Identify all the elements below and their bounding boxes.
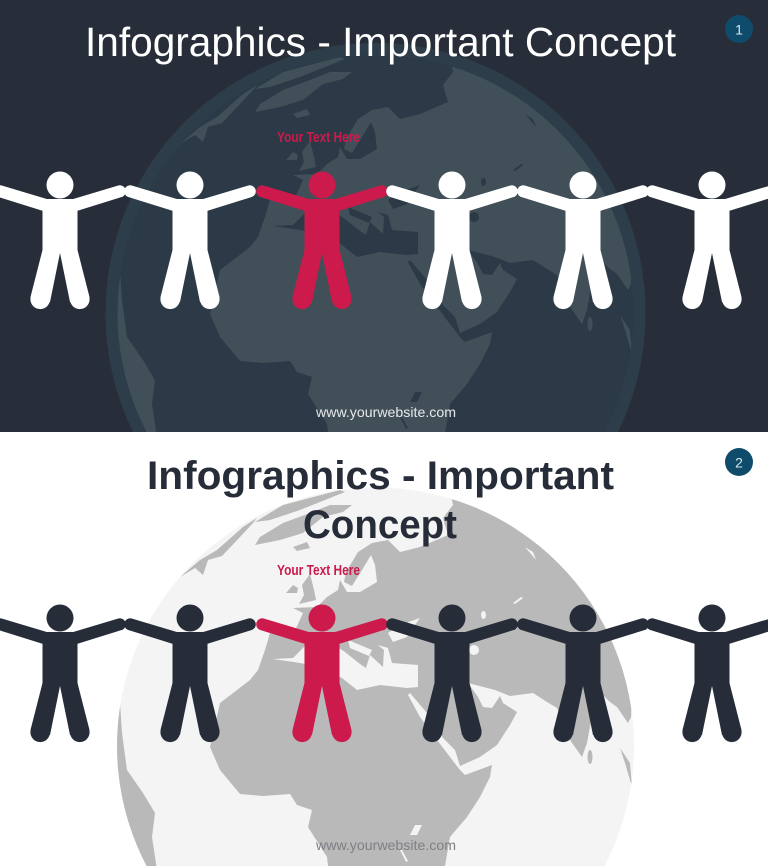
- badge: number 2: [725, 448, 753, 476]
- figure 5: [517, 604, 649, 742]
- figure 3 highlighted: [256, 604, 388, 742]
- figure 2: [124, 172, 256, 309]
- panel: light slide: [0, 432, 768, 866]
- title: light slide: Concept: [303, 503, 457, 547]
- badge: number 1: 1: [735, 22, 743, 38]
- title: light slide: Infographics - Important: [147, 454, 614, 498]
- label: your text here: Your Text Here: [277, 129, 360, 146]
- badge: number 2: 2: [735, 454, 743, 470]
- title: light slide: [147, 454, 614, 547]
- figures: chain of people, light slide: [0, 604, 768, 742]
- badge: number 1: [725, 15, 753, 43]
- figure 1: [0, 604, 126, 742]
- figure 4: [386, 604, 518, 742]
- figure 6: [646, 172, 768, 309]
- figure 6: [646, 604, 768, 742]
- figure 5: [517, 172, 649, 309]
- figure 4: [386, 172, 518, 309]
- label: your text here: Your Text Here: [277, 562, 360, 579]
- website text: www.yourwebsite.com: [315, 404, 456, 420]
- figures: chain of people, dark slide: [0, 172, 768, 309]
- globe: dark world map: [106, 43, 646, 432]
- panel: dark slide: [0, 0, 768, 432]
- globe: light world map: [117, 488, 634, 866]
- figure 2: [124, 604, 256, 742]
- figure 1: [0, 172, 126, 309]
- figure 3 highlighted: [256, 172, 388, 309]
- title: dark slide: Infographics - Important Concept: [85, 19, 677, 65]
- website text: www.yourwebsite.com: [315, 837, 456, 853]
